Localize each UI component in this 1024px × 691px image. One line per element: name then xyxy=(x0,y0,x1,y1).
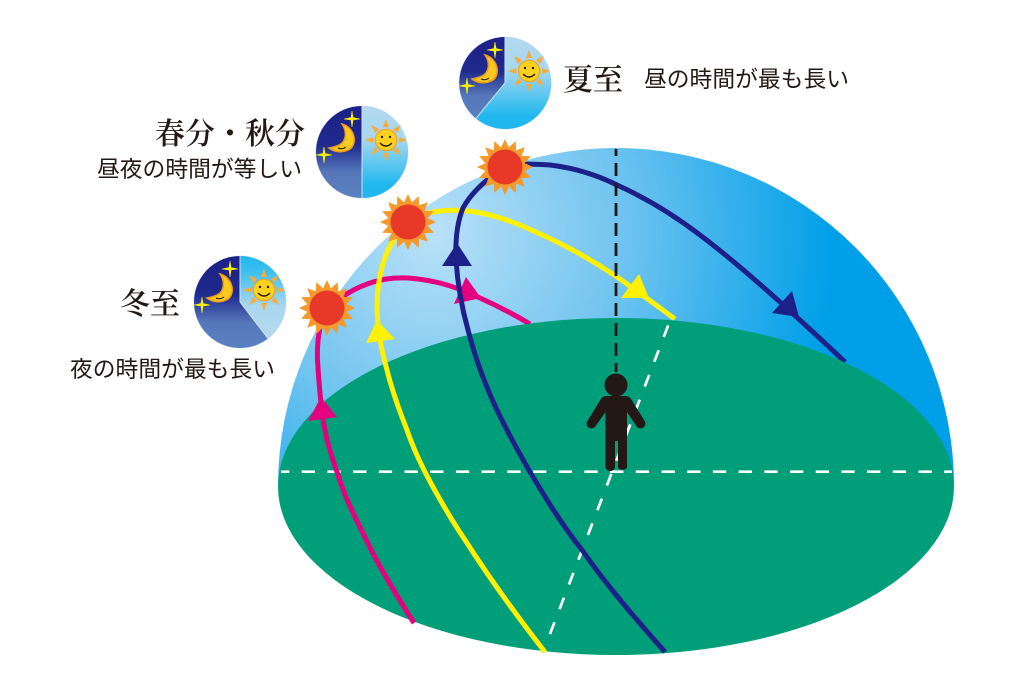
heading: winter solstice: 冬至 xyxy=(120,288,180,321)
sun: winter solstice xyxy=(299,280,355,336)
equinox descending path xyxy=(408,210,675,319)
zenith dashed line xyxy=(615,149,617,372)
ground ellipse xyxy=(278,318,954,655)
caption: winter solstice: 夜の時間が最も長い xyxy=(70,356,275,382)
pie: summer solstice day and night xyxy=(458,36,552,130)
north-south dashed line xyxy=(550,318,671,634)
summer solstice ascending path xyxy=(442,167,665,652)
summer solstice descending path xyxy=(503,164,845,362)
horizon dashed line xyxy=(281,470,952,473)
pie: equinox day and night xyxy=(316,106,408,198)
person figure xyxy=(587,374,645,471)
caption: summer solstice: 昼の時間が最も長い xyxy=(644,66,849,92)
winter solstice descending path xyxy=(327,277,530,324)
heading: equinox: 春分・秋分 xyxy=(155,118,305,151)
heading: summer solstice: 夏至 xyxy=(563,64,623,97)
caption: equinox: 昼夜の時間が等しい xyxy=(97,156,302,182)
equinox ascending path xyxy=(366,222,545,652)
pie: winter solstice day and night xyxy=(194,256,286,348)
winter solstice ascending path xyxy=(308,308,414,623)
sky dome xyxy=(278,148,954,486)
sun: summer solstice xyxy=(477,139,533,195)
sun: equinox xyxy=(380,194,436,250)
